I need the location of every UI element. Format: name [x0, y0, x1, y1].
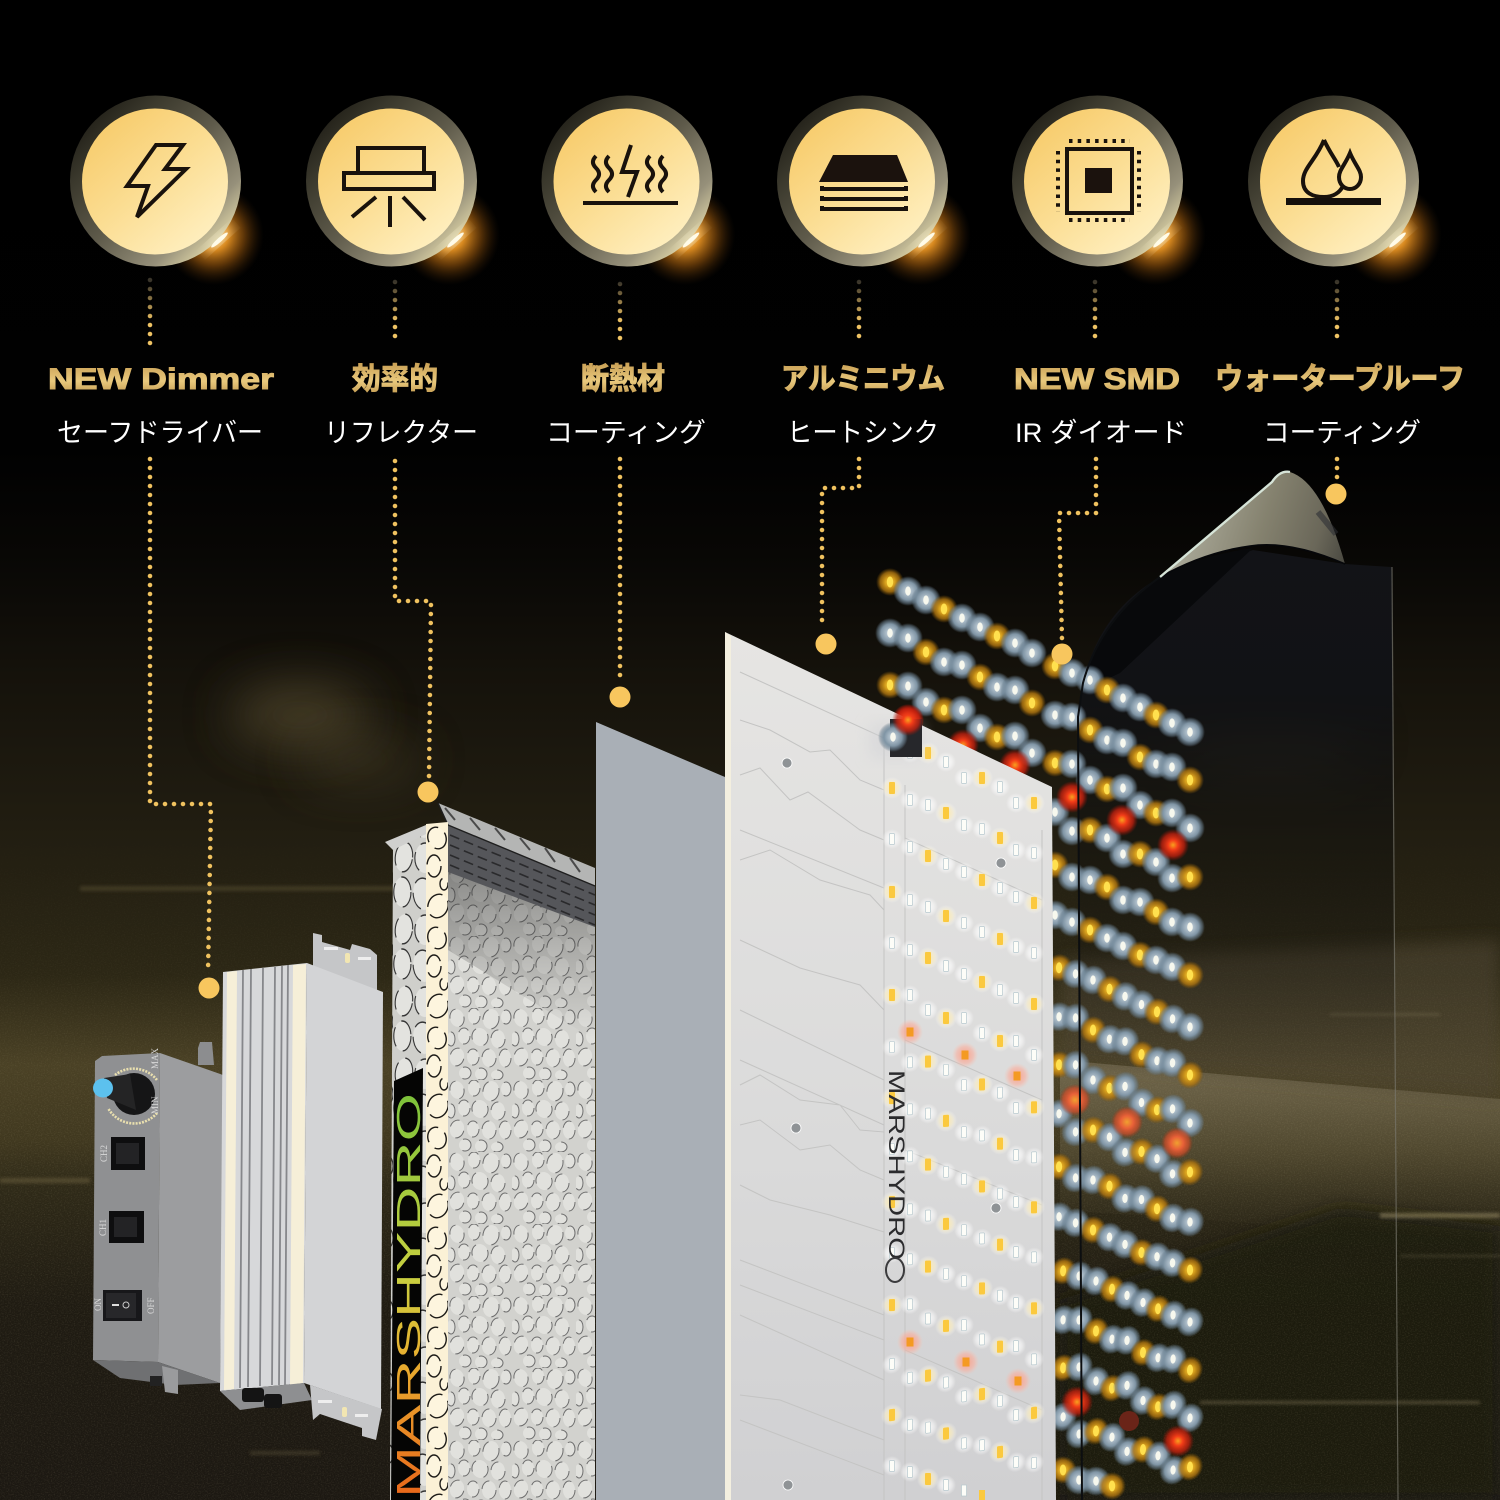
heading: ウォータープルーフ	[1215, 363, 1465, 396]
marker dot	[418, 782, 438, 802]
subheading: ヒートシンク	[787, 418, 939, 448]
subheading: リフレクター	[324, 418, 478, 448]
subheading: コーティング	[1263, 418, 1421, 448]
aluminium heat sink panel	[725, 632, 1056, 1500]
power switch: ON	[93, 1298, 103, 1311]
reflector with dimpled aluminium texture	[385, 803, 595, 1500]
subheading: コーティング	[546, 418, 706, 448]
circuit traces	[740, 672, 1042, 1500]
connector: label to reflector	[395, 461, 431, 778]
feature: waterproof coating	[1215, 96, 1465, 504]
icon badge: heat waves	[542, 96, 735, 285]
panel cut-out around the red diode	[870, 704, 924, 758]
red diodes on panel	[897, 1019, 1031, 1394]
connector: label to panel	[822, 459, 859, 628]
connector: badge to label	[148, 280, 152, 345]
marker dot	[1326, 484, 1346, 504]
feature: SMD IR diode	[1012, 96, 1206, 664]
reflector logo strip	[390, 1068, 427, 1500]
panel logo: MARSHYDRO	[884, 1070, 909, 1260]
film edge over the LEDs	[1078, 577, 1160, 1500]
feature: reflector	[306, 96, 500, 802]
connector: label to LEDs	[1059, 459, 1096, 640]
waterproof coating film with peeled corner	[1078, 472, 1398, 1500]
connector: label to film	[1335, 459, 1339, 478]
insulation sheet	[596, 722, 725, 1500]
mounting screws	[782, 758, 1006, 1490]
marker dot	[198, 978, 220, 998]
connector: badge to label	[618, 284, 622, 345]
subheading: セーフドライバー	[57, 418, 263, 448]
feature: insulation coating	[542, 96, 735, 708]
power switch	[93, 1290, 156, 1321]
port CH1	[98, 1211, 144, 1243]
feature: dimmer driver	[48, 96, 274, 998]
panel logo	[884, 1070, 909, 1282]
feature: aluminium heat sink	[777, 96, 970, 654]
marker dot	[1052, 644, 1072, 664]
driver unit: dimmer control box and power supply	[93, 933, 383, 1440]
reflector logo strip: MARSHYDRO	[390, 1093, 427, 1498]
dimmer knob with blue tip: MIN	[150, 1096, 160, 1114]
connector: badge to label	[857, 282, 861, 345]
connector: label to sheet	[618, 459, 622, 681]
icon badge: light fixture	[306, 96, 500, 285]
dimmer knob with blue tip	[93, 1047, 160, 1123]
heading: 効率的	[352, 363, 438, 396]
heading: NEW SMD	[1014, 363, 1180, 396]
icon badge: water drops	[1248, 96, 1442, 285]
subheading: IR ダイオード	[1015, 418, 1187, 448]
marker dot	[816, 634, 836, 654]
power switch: OFF	[146, 1297, 156, 1314]
heading: アルミニウム	[781, 363, 945, 396]
connector: badge to label	[393, 282, 397, 345]
port CH1: CH1	[98, 1219, 108, 1236]
heading: NEW Dimmer	[48, 363, 274, 396]
connector: badge to label	[1093, 282, 1097, 345]
marker dot	[610, 686, 630, 708]
dimmer knob with blue tip: MAX	[150, 1047, 160, 1069]
icon badge: stacked layers	[777, 96, 970, 285]
horizon light streaks	[0, 886, 1500, 1455]
port CH2: CH2	[99, 1145, 109, 1162]
connector: badge to label	[1335, 282, 1339, 342]
power supply body	[220, 933, 383, 1440]
connector: label to driver	[150, 459, 211, 973]
icon badge: chip	[1012, 96, 1206, 285]
LED array, rear blurred layer	[875, 568, 1205, 1500]
heading: 断熱材	[581, 363, 665, 396]
icon badge: lightning bolt	[70, 96, 264, 285]
port CH2	[99, 1137, 145, 1170]
control box	[93, 1042, 223, 1394]
